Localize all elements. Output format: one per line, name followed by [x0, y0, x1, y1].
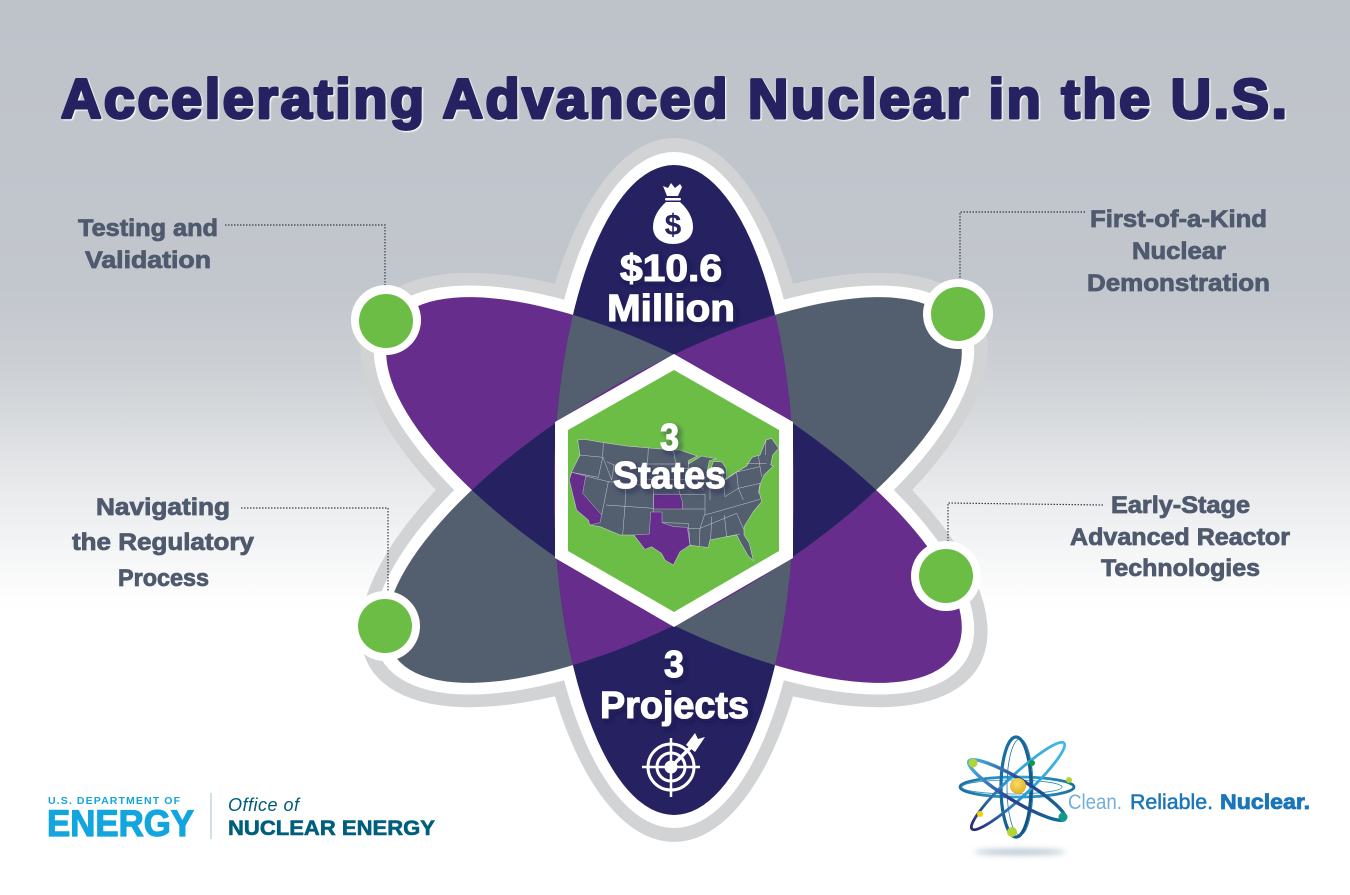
stat: 3 States: States	[613, 455, 726, 497]
logo: U.S. Department of Energy: NUCLEAR ENERGY	[228, 817, 435, 840]
label: first-of-a-kind nuclear demonstration: Demonstration	[1087, 270, 1270, 297]
stat: 3 States	[613, 417, 726, 497]
atom white outline	[315, 152, 1033, 828]
logo: U.S. Department of Energy	[47, 793, 435, 844]
contiguous states	[569, 438, 779, 565]
stat: 3 Projects: Projects	[600, 685, 749, 727]
tagline: Reliable.	[1130, 791, 1213, 814]
highlighted state: Texas	[634, 512, 690, 565]
label: first-of-a-kind nuclear demonstration: First-of-a-Kind	[1090, 206, 1267, 233]
stat: $10.6 Million	[607, 248, 735, 330]
label: early-stage advanced reactor technologies: Technologies	[1101, 555, 1260, 582]
label: early-stage advanced reactor technologies	[1070, 492, 1290, 582]
stat: $10.6 Million: $10.6	[620, 248, 722, 290]
tagline: Nuclear.	[1220, 791, 1310, 814]
label: early-stage advanced reactor technologies: Early-Stage	[1111, 492, 1250, 519]
slate orbit	[333, 224, 1015, 756]
logo shadow	[974, 849, 1066, 855]
purple orbit	[333, 224, 1015, 756]
connector: first-of-a-kind	[960, 212, 1085, 279]
label: navigating the regulatory process: Process	[118, 565, 209, 592]
map of the United States	[569, 438, 779, 565]
label: first-of-a-kind nuclear demonstration	[1087, 206, 1270, 297]
label: first-of-a-kind nuclear demonstration: Nuclear	[1132, 238, 1226, 265]
icon: target with arrow	[642, 733, 705, 797]
atom diagram	[364, 138, 988, 842]
stat: 3 Projects: 3	[664, 644, 684, 686]
atom outer grey outline	[296, 138, 1052, 842]
logo: U.S. Department of Energy: ENERGY	[47, 803, 194, 844]
state borders	[572, 440, 767, 547]
title: Accelerating Advanced Nuclear in the U.S.	[61, 67, 1287, 130]
purple overlap	[554, 315, 794, 665]
logo electrons	[968, 758, 1072, 837]
connector: testing and validation	[225, 225, 385, 285]
label: testing and validation: Testing and	[78, 215, 218, 242]
logo: U.S. Department of Energy: Office of	[228, 795, 301, 815]
node: navigating the regulatory process	[350, 591, 420, 661]
icon: money bag	[653, 183, 693, 244]
logo nucleus	[1010, 778, 1026, 794]
stat: $10.6 Million: Million	[607, 288, 735, 330]
navy vertical orbit	[554, 165, 794, 815]
highlighted state: Kansas	[654, 494, 682, 509]
logo: U.S. Department of Energy: U.S. DEPARTMENT OF	[48, 795, 181, 807]
label: navigating the regulatory process: the Regulatory	[72, 529, 255, 556]
stat: 3 Projects	[600, 644, 749, 727]
node: early-stage reactor technologies	[911, 541, 981, 611]
logo: atom mark	[960, 735, 1074, 855]
label: navigating the regulatory process	[72, 494, 255, 592]
hexagon white border	[555, 354, 793, 627]
center hexagon	[555, 354, 793, 627]
slate overlap	[554, 315, 794, 665]
tagline: Clean.	[1068, 791, 1122, 814]
navy overlap of tilted orbits	[472, 424, 876, 556]
node: first-of-a-kind demonstration	[923, 279, 993, 349]
tagline	[1068, 791, 1310, 814]
stat: 3 States: 3	[660, 417, 679, 459]
label: navigating the regulatory process: Navigating	[96, 494, 230, 521]
node: testing and validation	[351, 285, 421, 355]
label: testing and validation: Validation	[85, 247, 211, 274]
hexagon green fill	[568, 370, 779, 612]
label: testing and validation	[78, 215, 218, 274]
logo orbits	[960, 735, 1074, 837]
highlighted state: California	[569, 472, 602, 525]
connector: navigating	[241, 508, 388, 591]
icon: money bag: $	[665, 209, 682, 242]
label: early-stage advanced reactor technologies: Advanced Reactor	[1070, 524, 1290, 551]
connector: early-stage	[948, 503, 1103, 541]
